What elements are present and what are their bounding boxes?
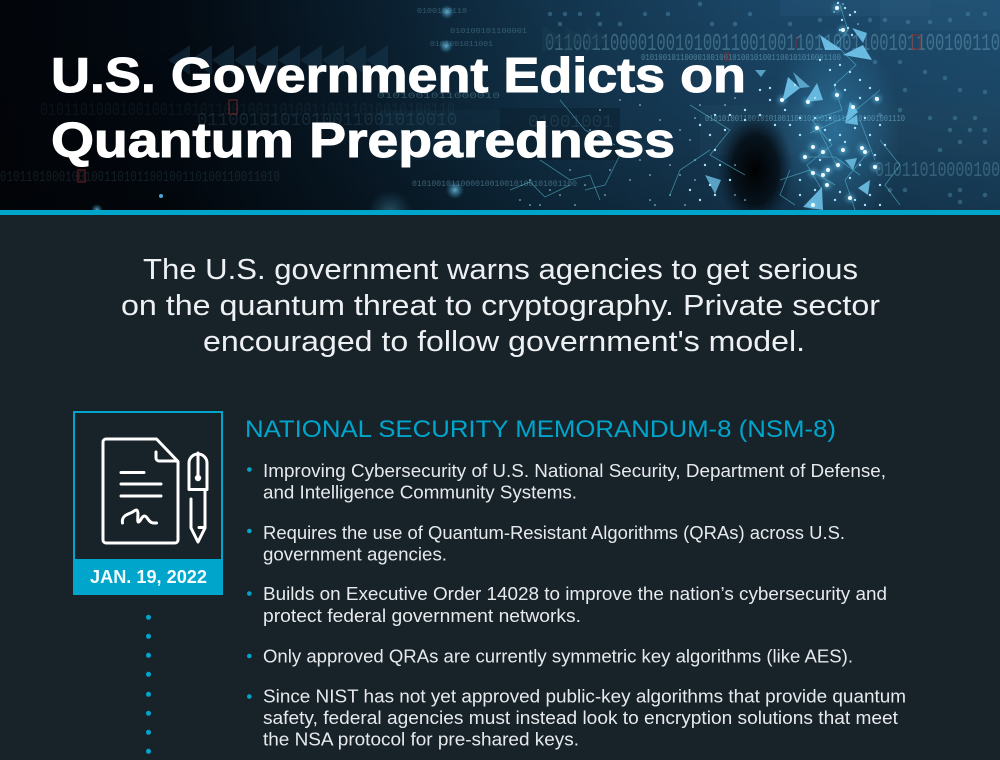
bullet 3: protect federal government networks. xyxy=(263,605,581,626)
header binary rows: 0100100110 xyxy=(417,8,467,16)
bullet 5 xyxy=(247,686,906,750)
title: Quantum Preparedness xyxy=(51,114,675,168)
header binary rows xyxy=(0,8,1000,189)
header banner xyxy=(0,0,1000,210)
section heading: NATIONAL SECURITY MEMORANDUM-8 (NSM-8) xyxy=(245,416,836,443)
header binary rows: 0101001011001 xyxy=(430,41,493,49)
bullet 2: government agencies. xyxy=(263,544,447,564)
date label: JAN. 19, 2022 xyxy=(90,566,207,587)
timeline dotted connector xyxy=(146,615,151,754)
bullet 1 xyxy=(247,460,886,502)
header arrow chevrons xyxy=(168,34,606,75)
bullet 2: Requires the use of Quantum-Resistant Algorithms (QRAs) across U.S. xyxy=(263,522,845,543)
header binary rows: 0101101000100100110101100100110100110011010 xyxy=(0,169,280,186)
intro text: The U.S. government warns agencies to get serious xyxy=(143,254,858,286)
header binary rows: 0110010101010011001010010 xyxy=(197,111,457,131)
panel: date card xyxy=(73,412,223,595)
intro text: encouraged to follow government's model. xyxy=(203,326,805,358)
title xyxy=(51,49,746,168)
header particle figure xyxy=(91,3,900,234)
bullet 1: Improving Cybersecurity of U.S. National Security, Department of Defense, xyxy=(263,460,886,481)
header silhouette shadow xyxy=(721,115,790,210)
header accent bar xyxy=(0,210,1000,215)
header circuit dots xyxy=(550,4,985,202)
header binary rows: 0101101000100100110101100100110100110011010010100110 xyxy=(40,101,455,121)
header binary rows: 010100101100001 xyxy=(450,28,527,36)
bullet 3: Builds on Executive Order 14028 to improve the nation’s cybersecurity and xyxy=(263,583,887,604)
bullet 5: safety, federal agencies must instead look to encryption solutions that meet xyxy=(263,707,898,728)
header binary rows: 0101001011000010010010100101001100101010001100 xyxy=(641,53,841,63)
header binary rows: 0101001011000010 xyxy=(377,92,500,101)
header figure glow xyxy=(779,41,891,210)
date band xyxy=(73,559,223,595)
intro text: on the quantum threat to cryptography. Private sector xyxy=(121,290,880,322)
intro text xyxy=(121,254,880,358)
bullet 5: the NSA protocol for pre-shared keys. xyxy=(263,728,579,750)
bullet list xyxy=(247,460,906,750)
bullet 4: Only approved QRAs are currently symmetric key algorithms (like AES). xyxy=(263,646,853,666)
icon: signed document and pen xyxy=(103,439,207,543)
header red binary accents xyxy=(78,35,920,182)
header binary rows: 01001001 xyxy=(528,113,613,133)
header binary rows: 0101001011000010010010100101001100 xyxy=(412,180,577,189)
bullet 1: and Intelligence Community Systems. xyxy=(263,482,577,502)
header binary rows: 01010100110010101001100101001001100101001001110 xyxy=(705,114,905,124)
bullet 2 xyxy=(247,522,845,564)
bullet 3 xyxy=(247,583,887,626)
bullet 5: Since NIST has not yet approved public-key algorithms that provide quantum xyxy=(263,686,906,706)
title: U.S. Government Edicts on xyxy=(51,49,746,103)
